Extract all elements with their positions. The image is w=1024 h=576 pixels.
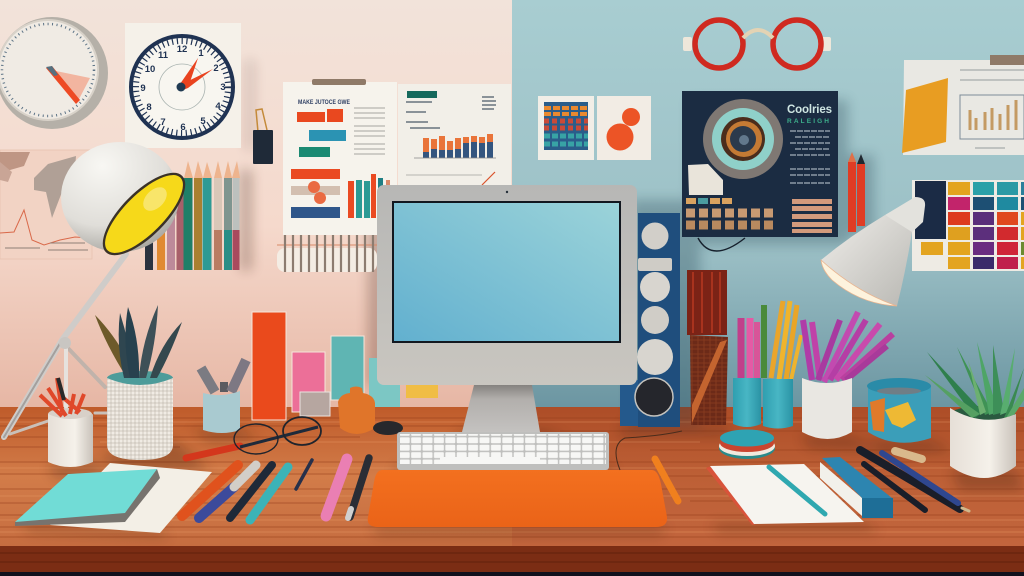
cups: teal with pink and yellow pencils: [733, 301, 801, 428]
coaster stack: [719, 430, 775, 459]
wall pencils set: [149, 161, 240, 270]
clock: square paper clock: 3: [220, 82, 226, 93]
mug: teal with world map: [867, 378, 931, 443]
clock: square paper clock: 2: [213, 63, 219, 74]
plant: left dark leaves: [95, 305, 182, 385]
chart sheet left: MAKE JUTOCE GWE: [298, 99, 351, 106]
colour swatch chart: [912, 180, 1024, 271]
computer mouse: [373, 421, 403, 435]
clock: square paper clock: 5: [200, 116, 206, 127]
lamp: left arm and tripod: [4, 254, 126, 437]
poster: Coolries camera lens: Coolries: [787, 104, 832, 116]
paper with orange block and bar chart: [902, 55, 1024, 155]
clock: square paper clock: 4: [215, 101, 221, 112]
pot: left textured white: [107, 378, 173, 460]
plant: right green leaves: [925, 342, 1024, 422]
clock: square paper clock: 9: [140, 83, 146, 94]
clock: square paper clock: 7: [160, 117, 166, 128]
pot: orange lidded: [338, 386, 375, 434]
wall: right blue: [512, 0, 1024, 410]
pens: right black and blue: [860, 450, 969, 511]
clock: square paper clock: 1: [198, 48, 204, 59]
wall: left pink: [0, 0, 512, 410]
cup: left pens in white cup: [40, 378, 93, 467]
cup: grey pencils in blue cup: [201, 360, 246, 433]
clock: square paper clock: 12: [177, 44, 187, 55]
binder clip hanging: [253, 109, 273, 164]
wall card: orange circles: [597, 96, 651, 160]
speaker: [620, 213, 680, 427]
clock: square paper clock: 8: [146, 102, 152, 113]
colour bars: swatches on wall: [252, 312, 438, 420]
poster: Coolries camera lens: [682, 91, 838, 251]
glasses: red round on wall: [683, 20, 831, 68]
lamp: left yellow spherical head: [61, 142, 198, 268]
chart sheet left: [283, 79, 397, 235]
glasses and red pen on desk: [186, 417, 321, 458]
clock: left wall clock with red hand: [0, 17, 108, 129]
pot: right white: [950, 408, 1016, 478]
orange desk mat: [368, 470, 667, 527]
orange highlighter: [655, 459, 678, 501]
notepad with teal pen: [706, 464, 864, 525]
keyboard: [397, 432, 609, 470]
monitor: body and blue screen: [377, 185, 637, 385]
pens group on desk left: [182, 458, 369, 520]
red pencils on wall: [848, 152, 865, 232]
poster: Coolries camera lens: RALEIGH: [787, 118, 829, 125]
ornament: glass cube: [300, 392, 330, 416]
spiral notebook: [277, 235, 377, 272]
lamp: right white shade: [821, 197, 925, 306]
blue book: [820, 457, 893, 518]
clock: square paper clock: 10: [145, 64, 155, 75]
teal notebook: [15, 469, 160, 526]
papers under teal notebook: [50, 463, 212, 533]
clock: square paper clock: [125, 23, 241, 148]
map poster with line chart: [0, 150, 92, 259]
clock: square paper clock: 11: [158, 50, 169, 61]
cable to speaker: [616, 431, 682, 470]
monitor: stand: [462, 385, 540, 432]
clock: square paper clock: 6: [180, 122, 186, 133]
chart sheet right with stacked bars: [398, 84, 511, 185]
wall card: colour tiles: [538, 96, 594, 160]
stacked red books: [687, 270, 728, 425]
desk surface and front edge: [0, 407, 1024, 576]
cup: white with magenta pencils: [802, 312, 893, 439]
